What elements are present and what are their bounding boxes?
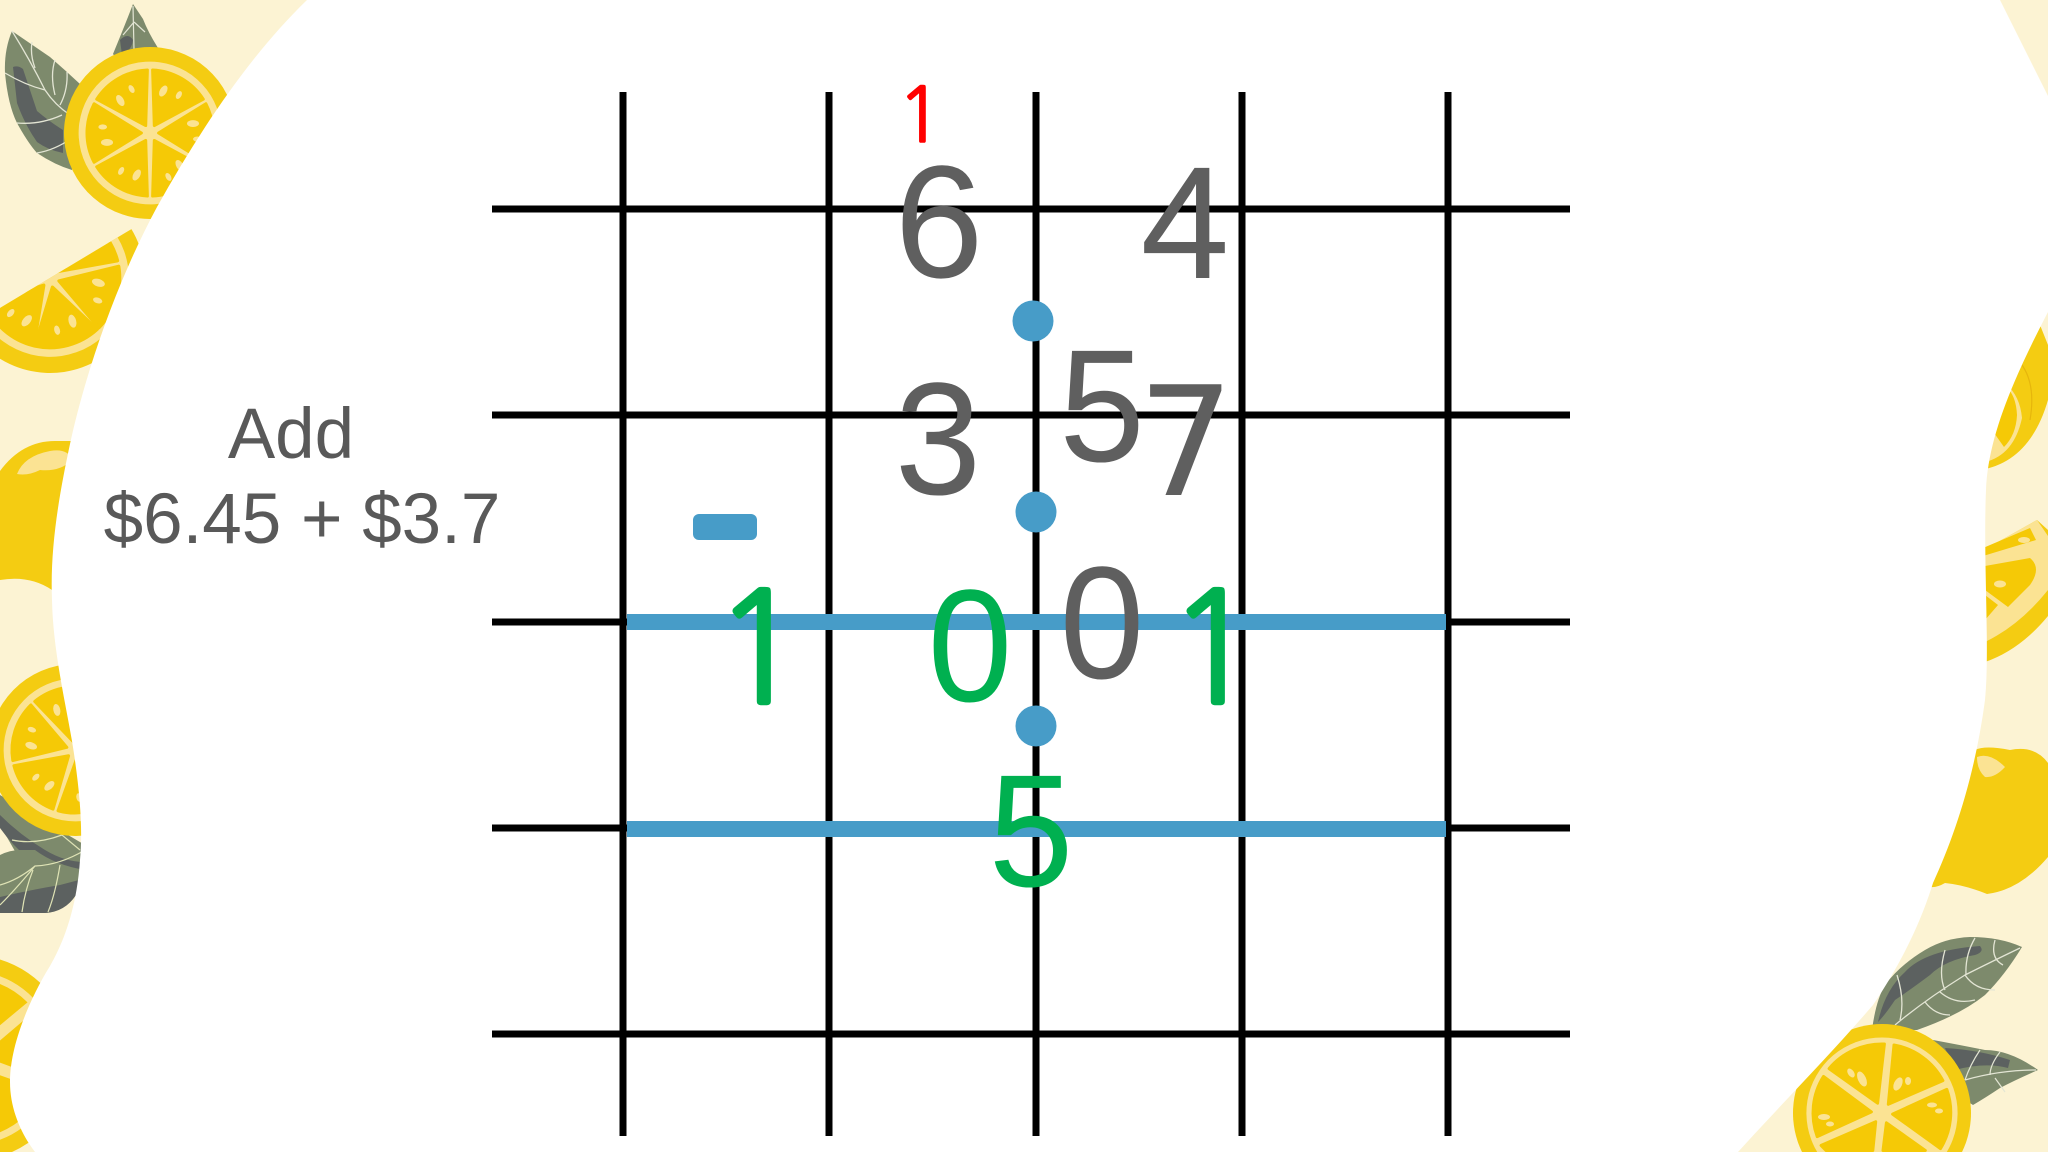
icon: lower-right lemon slice <box>1980 520 2048 662</box>
operator sign <box>693 514 757 540</box>
icon: top-left leaf large <box>5 31 95 170</box>
addend digits: 0 <box>1060 534 1144 713</box>
addend digits: 4 <box>1141 133 1229 312</box>
icon: upper-right lemon slice <box>1980 325 2048 470</box>
addend digits: 5 <box>1059 317 1145 496</box>
icon: whole lemon left <box>0 441 85 592</box>
answer digits <box>712 557 1260 921</box>
answer digits: 5 <box>989 742 1073 921</box>
icon: top-left lemon slice <box>33 16 267 250</box>
icon: bottom-right lemon slice <box>1793 1024 1971 1152</box>
decimal point middle <box>1016 492 1056 532</box>
addend digits: 6 <box>895 132 983 311</box>
icon: left lemon slice <box>0 648 177 852</box>
answer digits: 1 <box>1166 572 1260 726</box>
heading: problem text: Add <box>228 395 354 474</box>
heading: problem text <box>104 395 500 559</box>
icon: bottom-left lemon slice <box>0 960 73 1152</box>
sum rule line two <box>627 821 1446 837</box>
decimal point bottom <box>1016 706 1056 746</box>
sum rule line one <box>627 614 1446 630</box>
answer digits: 1 <box>712 572 806 726</box>
icon: whole lemon right <box>1925 748 2048 894</box>
addend digits <box>895 132 1234 713</box>
place value grid <box>492 92 1570 1136</box>
icon: half lemon slice left <box>0 191 180 408</box>
icon: bottom-right leaf upper <box>1872 937 2022 1030</box>
addend digits: 3 <box>895 350 981 529</box>
answer digits: 0 <box>928 557 1012 736</box>
icon: top-left leaf small <box>113 4 158 70</box>
addend digits: 7 <box>1138 354 1234 531</box>
icon: bottom-right leaf lower <box>1933 1040 2038 1105</box>
icon: lower-left leaves <box>0 795 85 913</box>
decimal point top <box>1012 300 1054 342</box>
carry digit: 1 <box>897 77 943 153</box>
heading: problem text: $6.45 + $3.7 <box>104 480 500 559</box>
